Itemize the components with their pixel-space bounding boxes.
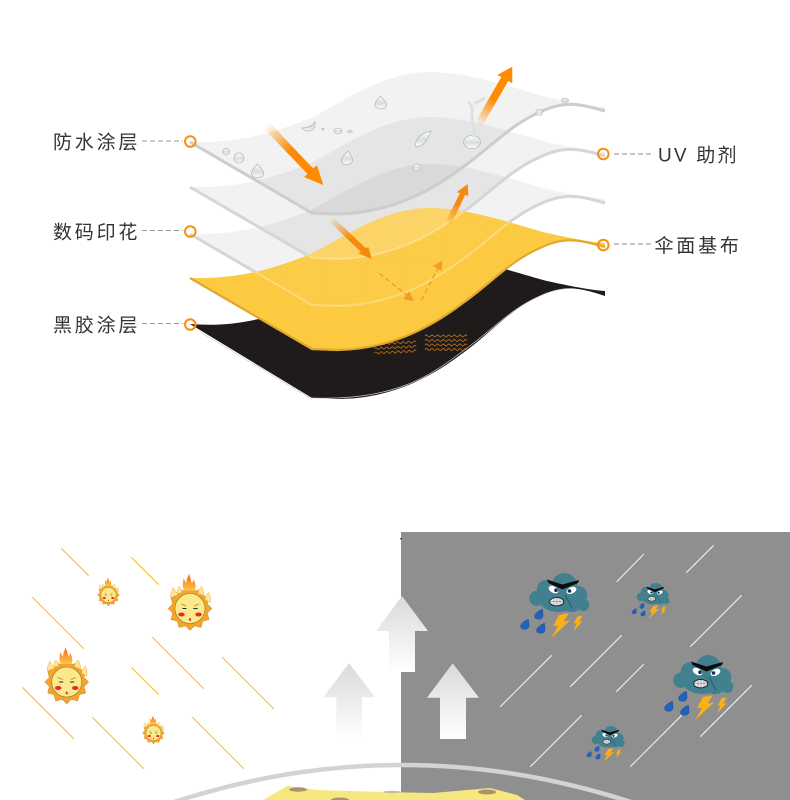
- layer: UV additive membrane: [190, 117, 605, 259]
- arrow: rain striking the top layer: [264, 123, 323, 185]
- layered fabric diagram: [190, 67, 605, 399]
- icon: storm cloud large top: [520, 573, 589, 638]
- layer: black adhesive coating: [190, 256, 605, 399]
- label: black adhesive coating: 黑胶涂层: [53, 314, 140, 336]
- icon: storm cloud small top: [632, 583, 670, 619]
- label: UV additive: UV 助剂: [658, 144, 739, 166]
- label: waterproof coating: 防水涂层: [53, 132, 140, 154]
- label: digital print: [53, 222, 196, 244]
- black layer woven texture: [374, 335, 467, 354]
- label: waterproof coating: [53, 132, 196, 154]
- arrow: white up arrow left: [323, 663, 375, 738]
- icon: sun large left: [45, 647, 89, 704]
- arrow: vapour leaving the top layer: [475, 67, 512, 127]
- layer: top waterproof membrane: [190, 72, 605, 214]
- dashed arrow: out of base fabric: [422, 261, 442, 300]
- label: face base fabric: 伞面基布: [654, 235, 742, 257]
- label: UV additive: [598, 144, 739, 166]
- layer: yellow base fabric: [190, 208, 606, 352]
- rain streaks: [500, 545, 752, 767]
- icon: sun large top: [168, 574, 212, 630]
- dashed arrow: inside base fabric: [379, 273, 414, 301]
- dome arc over fabric: [165, 765, 640, 800]
- icon: storm cloud small bottom: [587, 726, 625, 762]
- icon: storm cloud large right: [664, 655, 733, 720]
- icon: sun small top: [98, 578, 120, 606]
- arrow: white up arrow right: [427, 663, 479, 739]
- arrow: up through the second layer: [446, 184, 468, 225]
- arrow: white up arrow centre: [376, 596, 428, 672]
- panel: rainy side background: [401, 532, 790, 800]
- label: black adhesive coating: [53, 314, 196, 336]
- label: face base fabric: [598, 235, 742, 257]
- sunlight rays: [22, 548, 274, 769]
- arrow: through the second layer: [330, 218, 372, 259]
- layer: lower membrane: [190, 164, 605, 306]
- icon: sun small bottom: [142, 716, 164, 744]
- fabric sample under dome: [263, 786, 525, 800]
- label: digital print: 数码印花: [53, 222, 140, 244]
- water droplets: [223, 96, 568, 178]
